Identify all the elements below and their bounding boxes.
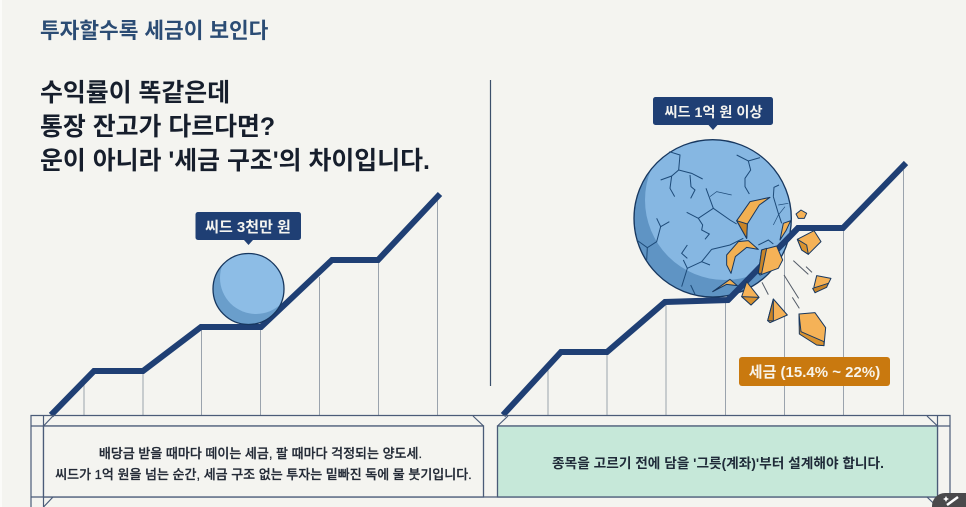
headline: 운이 아니라 '세금 구조'의 차이입니다. bbox=[40, 147, 430, 175]
title: 투자할수록 세금이 보인다 bbox=[40, 19, 268, 43]
ball: cracked large seed bbox=[633, 139, 792, 298]
headline bbox=[40, 79, 430, 175]
panel: problem statement: 배당금 받을 때마다 떼이는 세금, 팔 때마다 걱정되는 양도세. bbox=[99, 446, 422, 461]
icon: watermark badge bbox=[932, 493, 966, 507]
debris lines bbox=[762, 261, 812, 308]
cracks bbox=[637, 152, 788, 295]
label: seed 100 million or more bbox=[653, 97, 773, 130]
headline: 수익률이 똑같은데 bbox=[40, 79, 230, 107]
chart: large seed staircase bbox=[503, 163, 906, 415]
chart: small seed staircase bbox=[51, 194, 440, 415]
panel: solution statement: 종목을 고르기 전에 담을 '그릇(계좌)'부터 설계해야 합니다. bbox=[552, 456, 884, 471]
label: seed 100 million or more: 씨드 1억 원 이상 bbox=[664, 105, 763, 121]
embedded shards bbox=[713, 197, 791, 292]
divider between charts bbox=[490, 80, 492, 386]
label: seed 30 million: 씨드 3천만 원 bbox=[205, 219, 291, 236]
panel: problem statement bbox=[44, 426, 484, 497]
label: tax rate bbox=[739, 357, 890, 386]
label: tax rate: 세금 (15.4% ~ 22%) bbox=[749, 364, 880, 381]
shards: tax fragments bbox=[713, 197, 831, 346]
label: seed 30 million bbox=[196, 212, 301, 245]
slope over the large ball bbox=[728, 228, 843, 300]
bottom frame bbox=[31, 416, 950, 507]
panel: solution statement bbox=[498, 426, 938, 497]
panel: problem statement: 씨드가 1억 원을 넘는 순간, 세금 구조 없는 투자는 밑빠진 독에 물 붓기입니다. bbox=[55, 467, 472, 482]
ball: small seed bbox=[212, 252, 285, 325]
flying shards bbox=[742, 210, 831, 346]
headline: 통장 잔고가 다르다면? bbox=[40, 113, 275, 141]
